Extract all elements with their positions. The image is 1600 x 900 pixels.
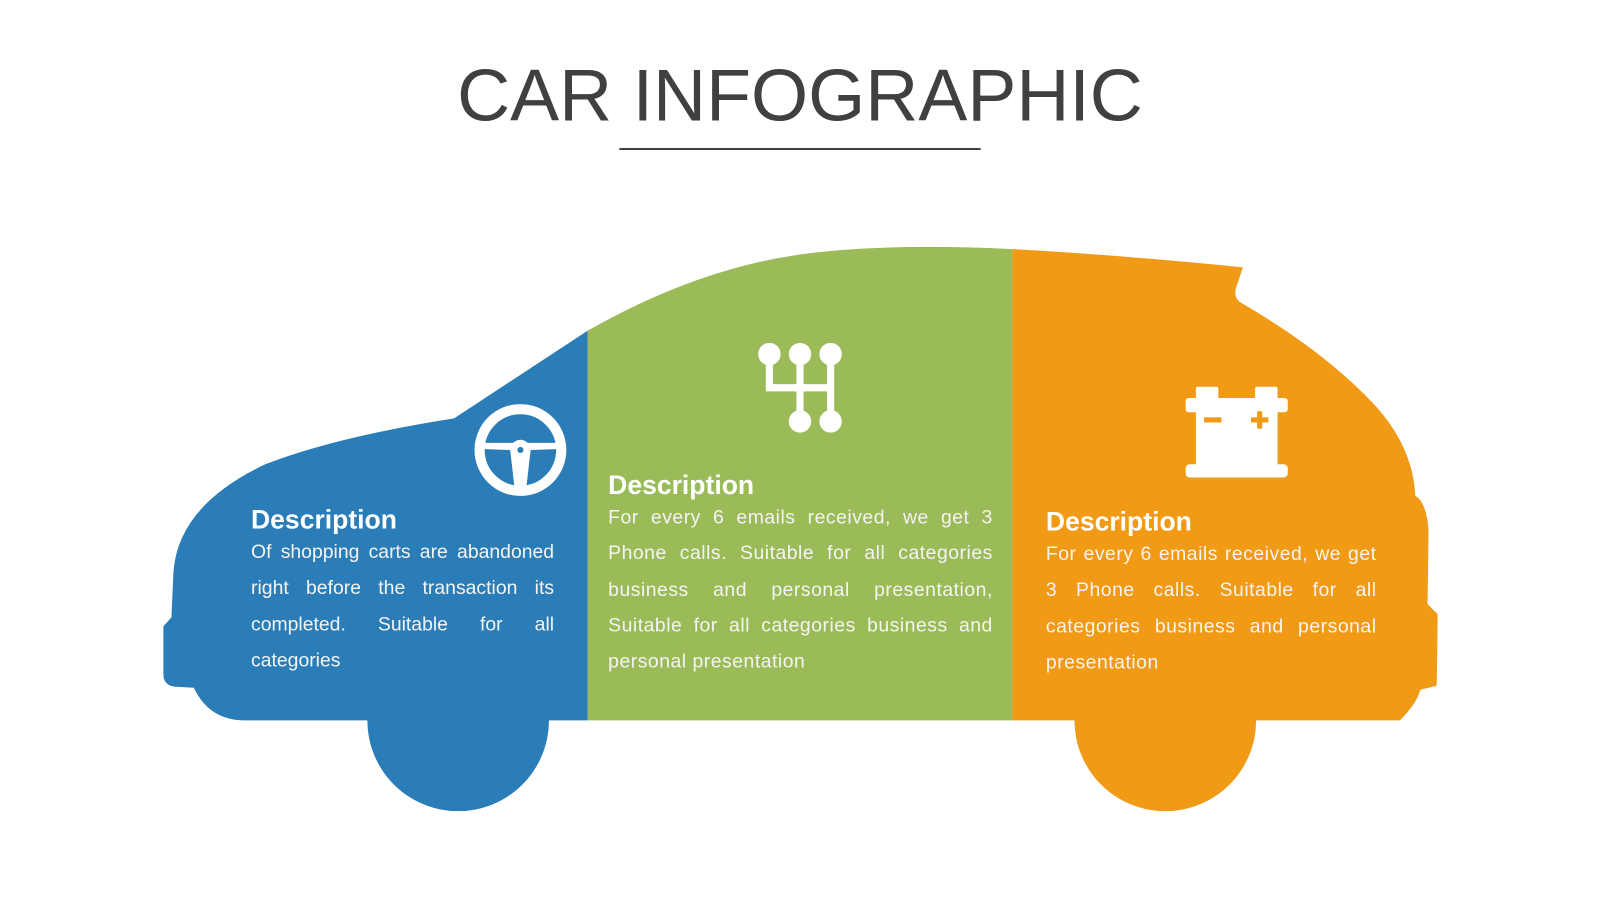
text: blue panel: Of shopping carts are abandoned right before the transaction its completed. Suitable for all categories xyxy=(251,542,554,671)
icon: gear shift xyxy=(758,343,842,433)
text: blue panel: Description xyxy=(251,504,397,535)
text: green panel: For every 6 emails received, we get 3 Phone calls. Suitable for all categories business and personal presentation, Suitable for all categories business and personal presentation xyxy=(608,507,993,673)
title: CAR INFOGRAPHIC xyxy=(457,55,1143,137)
text: orange panel: Description xyxy=(1046,506,1192,537)
text: orange panel: For every 6 emails received, we get 3 Phone calls. Suitable for all categories business and personal presentation xyxy=(1046,544,1377,673)
text: green panel: Description xyxy=(608,469,754,500)
car shape xyxy=(163,246,1438,812)
icon: steering wheel xyxy=(480,409,561,491)
icon: battery xyxy=(1186,387,1288,478)
